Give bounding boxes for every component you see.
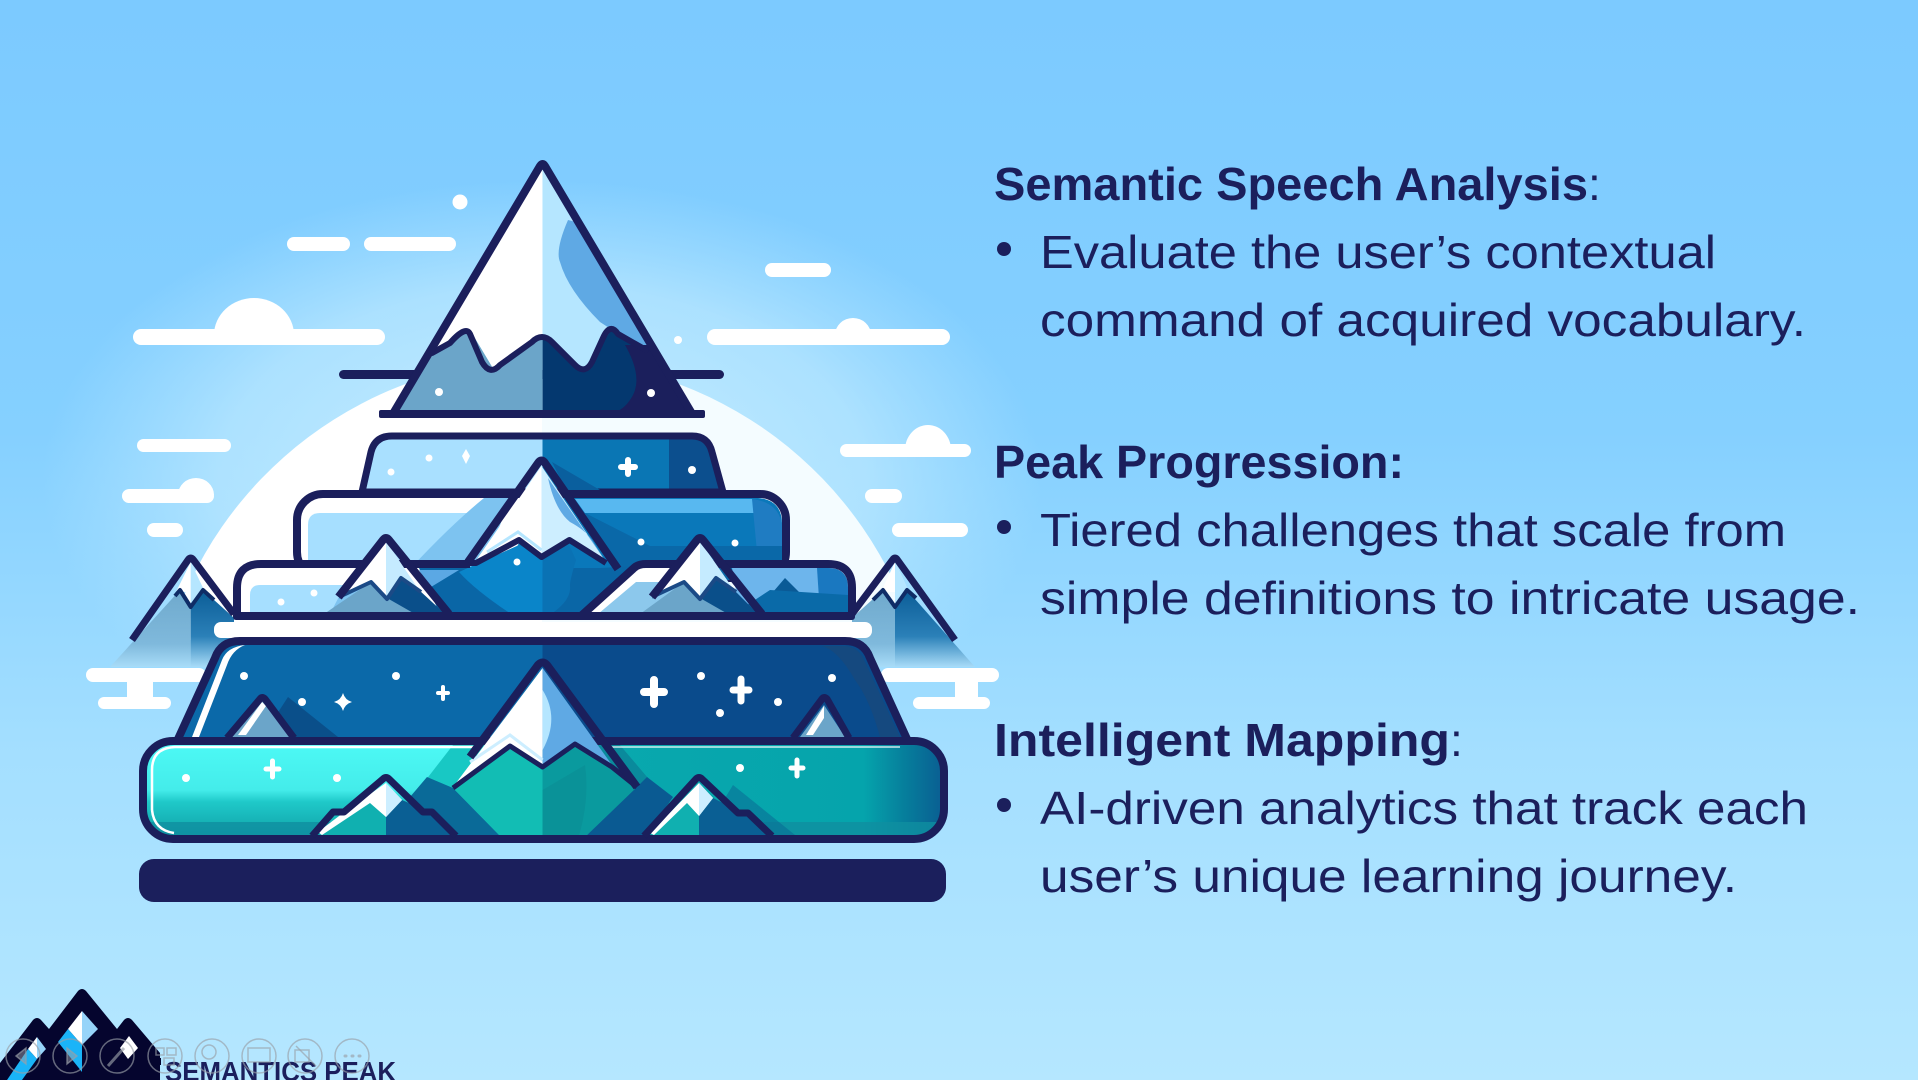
side peak right — [852, 558, 975, 667]
small peak right, base ledge — [644, 778, 772, 836]
bullet 2: Tiered challenges that scale from — [1040, 504, 1786, 556]
tier 3: middle ledge — [297, 494, 786, 580]
small peak left, base ledge — [312, 778, 456, 836]
heading: Semantic Speech Analysis: Semantic Speech Analysis : — [994, 158, 1601, 210]
bullet 1: command of acquired vocabulary. — [1040, 294, 1806, 346]
bullet 2 — [997, 504, 1860, 624]
ground bar — [139, 859, 946, 902]
bullet 3: user’s unique learning journey. — [1040, 850, 1737, 902]
slideshow toolbar icons — [6, 1039, 369, 1073]
horizon line behind summit — [339, 370, 724, 379]
heading: Peak Progression: Peak Progression: — [994, 436, 1404, 488]
tier 2: upper ledge — [362, 436, 723, 492]
small peak left, lower ledge — [324, 538, 449, 614]
bullet 3 — [997, 782, 1808, 902]
ledge base line — [233, 612, 855, 620]
small peak right, lower ledge — [640, 538, 762, 614]
bullet 1: Evaluate the user’s contextual — [1040, 226, 1716, 278]
central peak of base ledge — [453, 662, 637, 788]
bullet 1 — [997, 226, 1806, 346]
clouds — [86, 194, 999, 709]
heading: Intelligent Mapping: Intelligent Mapping : — [994, 714, 1463, 766]
white sun halo — [168, 359, 916, 640]
side peak left — [110, 558, 234, 667]
white divider bar — [214, 622, 872, 638]
soft glow behind mountain — [42, 180, 1042, 780]
logo: Semantics Peak — [0, 989, 396, 1080]
summit peak — [379, 164, 705, 418]
central peak of middle ledge — [467, 460, 618, 569]
bullet 2: simple definitions to intricate usage. — [1040, 572, 1860, 624]
bullet 3: AI-driven analytics that track each — [1040, 782, 1808, 834]
tier 4: lower ledge — [237, 545, 852, 616]
tier 5: deep blue ledge — [178, 641, 907, 739]
tier 6: teal base ledge — [143, 741, 945, 839]
